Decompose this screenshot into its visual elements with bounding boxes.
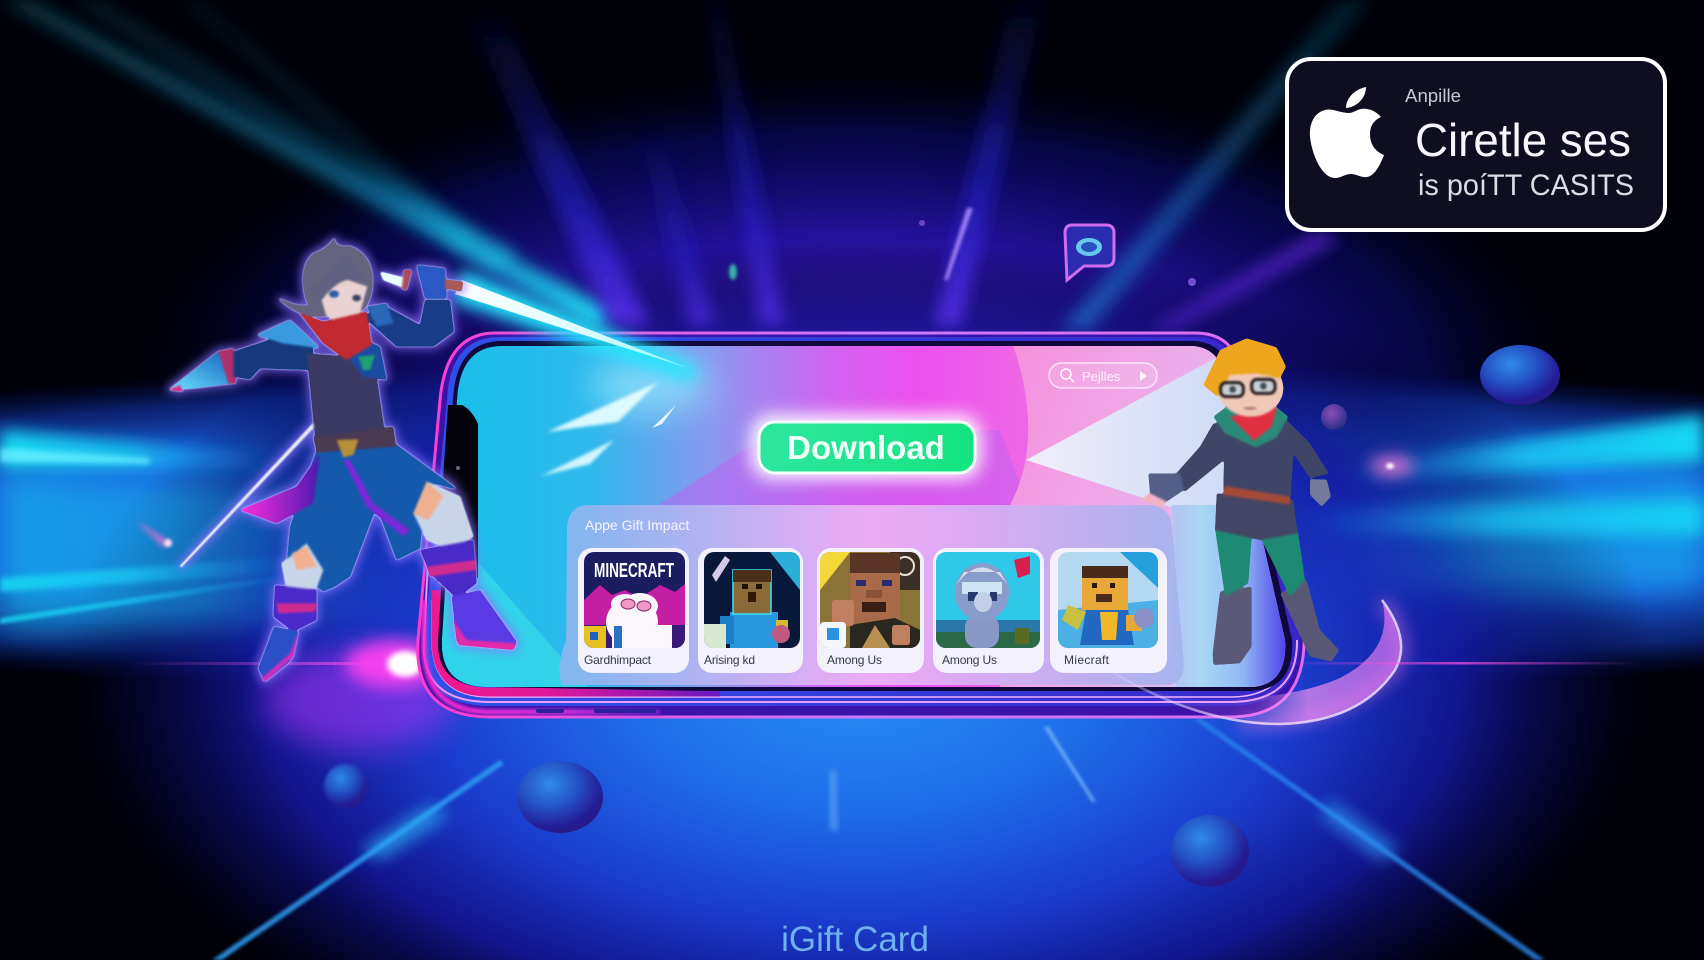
game card 3 <box>817 548 924 673</box>
pointed gauntlet <box>168 352 233 390</box>
coat skirt <box>287 443 458 592</box>
sphere: bottom left <box>517 761 603 833</box>
download button <box>750 414 982 480</box>
glasses <box>1221 379 1275 397</box>
face <box>318 278 367 324</box>
panel title: Appe Gift Impact <box>585 517 689 533</box>
swirl glow at phone corner <box>1112 600 1640 724</box>
game card 2: Arising kd <box>704 653 755 667</box>
smartphone <box>418 333 1304 717</box>
game card 1: Gardhimpact <box>584 653 652 667</box>
right leg <box>413 482 473 550</box>
game card 4 <box>933 548 1044 673</box>
lower left pane <box>442 562 587 687</box>
right hand <box>1310 479 1331 507</box>
left hand <box>1148 473 1184 502</box>
torso <box>307 353 385 437</box>
game card 5 <box>1050 548 1167 673</box>
face <box>1218 360 1283 417</box>
search pill: Pejlles <box>1082 369 1121 384</box>
footer title: iGift Card <box>781 920 929 959</box>
notch <box>436 405 478 582</box>
game card 4: Among Us <box>942 653 997 667</box>
sphere: upper right <box>1480 345 1560 405</box>
badge heading: Ciretle ses <box>1415 114 1631 166</box>
magenta tail <box>240 453 320 523</box>
hair back <box>275 233 373 317</box>
shorts <box>1215 493 1298 540</box>
belt <box>313 427 396 453</box>
phone screen <box>440 345 1290 690</box>
jacket <box>1173 420 1329 497</box>
search pill <box>1049 363 1157 388</box>
glove <box>417 265 447 298</box>
belt <box>1223 486 1290 504</box>
character: right boy <box>1140 338 1339 665</box>
green legs <box>1215 528 1252 597</box>
game card 2 <box>698 548 803 673</box>
collar <box>1213 407 1288 447</box>
badge subheading: is poíTT CASITS <box>1418 169 1634 202</box>
light shards <box>541 382 676 476</box>
raised arm <box>363 300 454 347</box>
boots <box>1213 587 1252 665</box>
sphere: bottom right <box>1171 815 1249 887</box>
character: left warrior <box>168 233 517 682</box>
left leg <box>282 543 323 590</box>
frame accent lines <box>424 560 1297 713</box>
scarf <box>300 312 372 360</box>
apple badge <box>1287 59 1665 230</box>
icon: apple logo <box>1310 87 1384 178</box>
sphere: far left <box>324 764 368 808</box>
game card 1 <box>578 548 689 673</box>
game card 1: MINECRAFT <box>594 560 674 582</box>
left sword with glow <box>450 270 700 382</box>
sphere: small purple <box>1321 404 1347 430</box>
bottom right blue tint <box>1172 505 1290 690</box>
screen haze <box>590 355 710 415</box>
right pink pane <box>1000 345 1290 690</box>
badge small label: Anpille <box>1405 86 1461 106</box>
floating spheres <box>324 345 1560 887</box>
game card 5: Miecraft <box>1064 653 1110 667</box>
download button: Download <box>787 429 945 466</box>
game panel <box>559 505 1184 685</box>
white triangle pane <box>1026 358 1226 508</box>
icon: chat bubble <box>1065 225 1114 280</box>
phone frame <box>418 333 1304 717</box>
game card 3: Among Us <box>827 653 882 667</box>
hair <box>1203 338 1286 397</box>
arm and shoulder <box>233 335 313 379</box>
thin sword <box>179 421 318 568</box>
